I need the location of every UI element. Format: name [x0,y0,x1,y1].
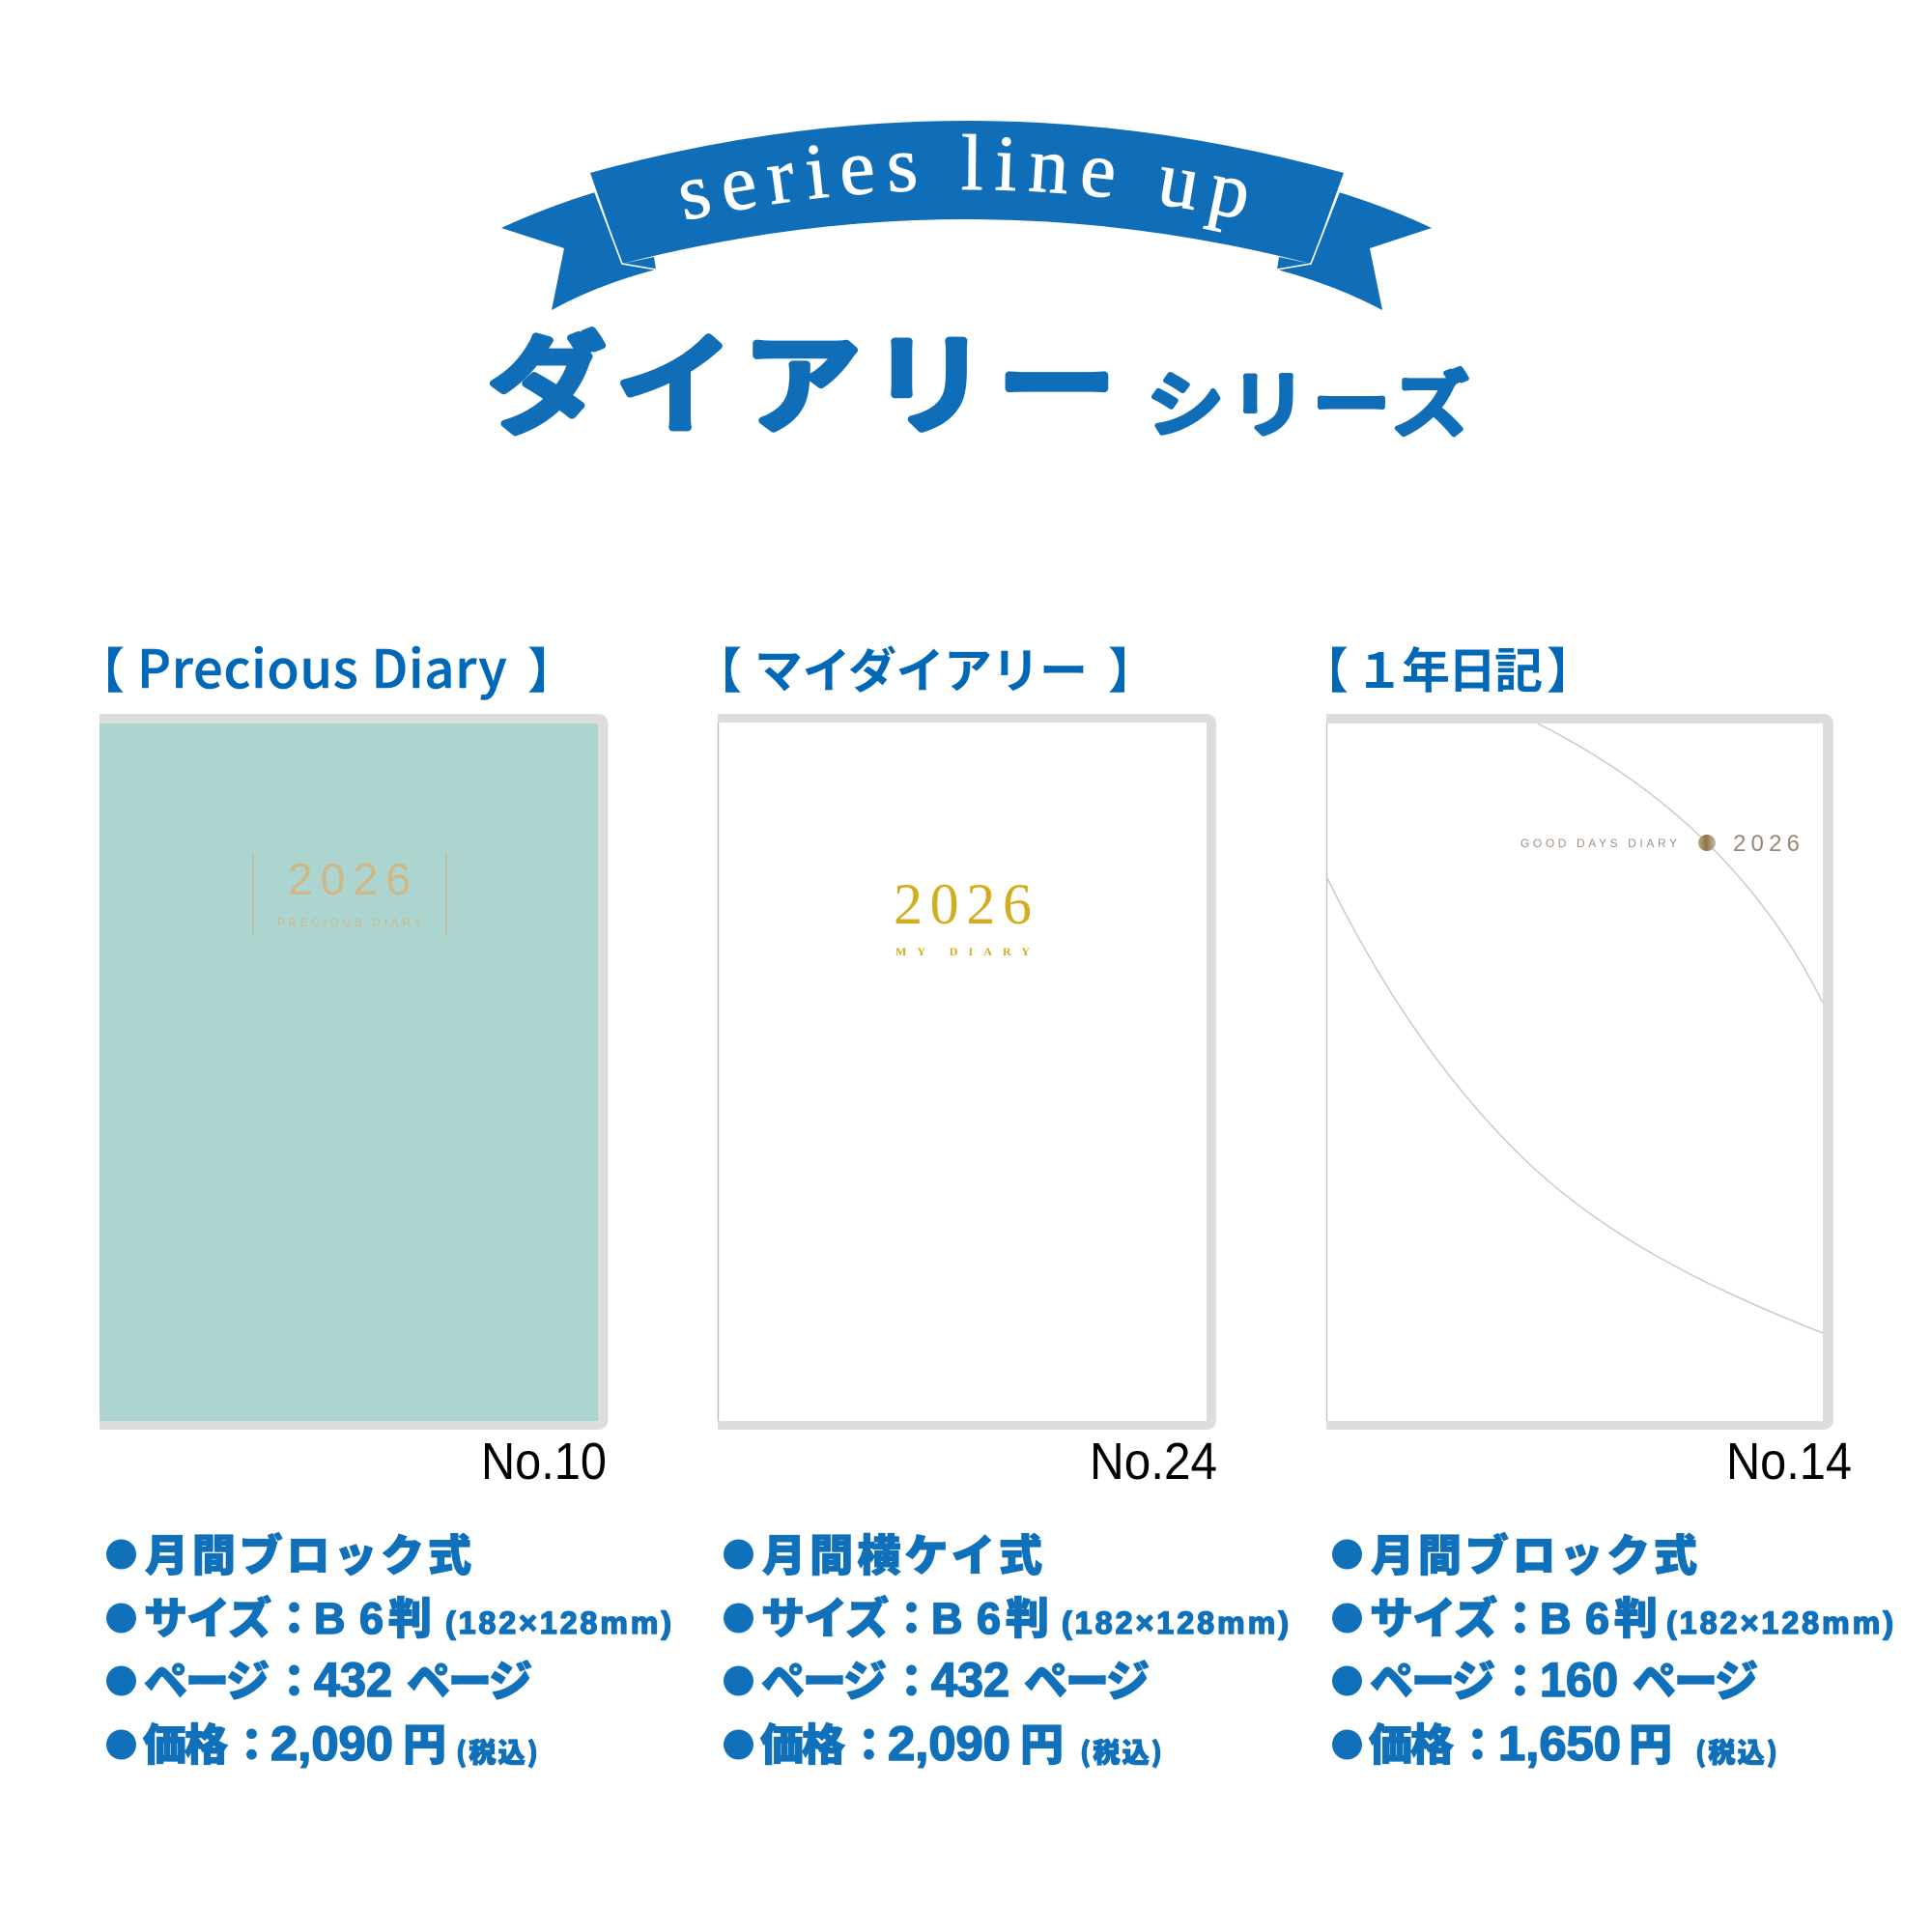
specs list: 2,090 [888,1717,1010,1771]
specs list: B6 [314,1594,384,1643]
heading: 】 [1108,633,1156,702]
cover gold dot [1698,835,1716,851]
specs list: (182×128mm) [1666,1605,1893,1640]
specs list: ページ [407,1646,532,1709]
column 2: My Diary [694,633,1289,1773]
heading: 【 [1300,633,1349,702]
heading: 】 [1547,633,1595,702]
specs list: 判 [1614,1583,1658,1646]
cover year: 2026 [894,872,1032,936]
specs list: B6 [931,1594,1001,1643]
cover name: GOOD DAYS DIARY [1520,837,1677,850]
specs list: 価格 [143,1710,228,1773]
heading: マイダイアリー [754,633,1088,702]
cover frame lines [253,853,446,935]
heading: Precious Diary [137,627,507,703]
specs list: 160 [1540,1653,1618,1707]
heading: 【 [76,633,125,702]
specs list: ： [890,1646,933,1709]
specs list: ページ [761,1646,887,1709]
specs list: (税込) [456,1732,538,1771]
specs list: ： [847,1710,891,1773]
specs list: ページ [1633,1646,1758,1709]
specs list: ： [1498,1646,1542,1709]
specs list: 価格 [760,1710,845,1773]
heading: 】 [527,633,576,702]
specs list [1332,1520,1893,1773]
specs list: 月間ブロック式 [145,1520,471,1583]
specs list: 円 [1629,1710,1672,1773]
specs list: (税込) [1695,1732,1777,1771]
specs list: ページ [1024,1646,1150,1709]
specs list: ： [890,1583,933,1646]
specs list: 円 [1020,1710,1064,1773]
specs list: (182×128mm) [445,1605,671,1640]
product number: No.10 [481,1433,607,1491]
specs list: サイズ [144,1583,271,1646]
specs list: 価格 [1369,1710,1454,1773]
cover arc lower [1326,876,1823,1333]
specs list [106,1520,671,1773]
specs list: サイズ [1370,1583,1497,1646]
ribbon fold lines [595,192,1339,270]
specs list: ： [230,1710,273,1773]
cover arc upper [1538,724,1823,1003]
specs list: ： [1498,1583,1542,1646]
ribbon left tail [501,192,656,310]
cover year: 2026 [288,854,411,904]
specs list: 判 [1006,1583,1049,1646]
specs list: 月間ブロック式 [1371,1520,1697,1583]
heading: １年日記 [1355,633,1543,702]
specs list: サイズ [761,1583,889,1646]
cover name: PRECIOUS DIARY [277,918,421,929]
specs list: 1,650 [1498,1717,1621,1771]
cover name: MY DIARY [895,945,1030,958]
book cover [718,714,1216,1430]
column 3: 1-year diary [1300,633,1893,1773]
specs list: ： [272,1646,316,1709]
specs list: ： [272,1583,316,1646]
ribbon right tail [1277,192,1432,310]
specs list: 円 [403,1710,446,1773]
book cover [1326,714,1833,1430]
specs list: 2,090 [270,1717,393,1771]
specs list: 判 [388,1583,432,1646]
specs list: 432 [931,1653,1009,1707]
ribbon main band [590,121,1344,264]
banner ribbon [501,121,1432,310]
title large: ダイアリー [488,298,1116,455]
product number: No.14 [1726,1433,1852,1491]
specs list: B6 [1540,1594,1609,1643]
specs list: ： [1456,1710,1499,1773]
specs list: ページ [144,1646,270,1709]
product number: No.24 [1090,1433,1217,1491]
specs list: (182×128mm) [1062,1605,1289,1640]
main title [488,298,1469,455]
specs list: 432 [314,1653,392,1707]
specs list: 月間横ケイ式 [762,1520,1042,1583]
book cover [99,714,609,1430]
title small: シリーズ [1147,348,1469,452]
heading: 【 [694,633,742,702]
specs list [724,1520,1289,1773]
specs list: (税込) [1080,1732,1162,1771]
cover year: 2026 [1733,831,1800,857]
banner text: series line up [680,133,1246,232]
column 1: Precious Diary [76,627,671,1773]
specs list: ページ [1370,1646,1495,1709]
